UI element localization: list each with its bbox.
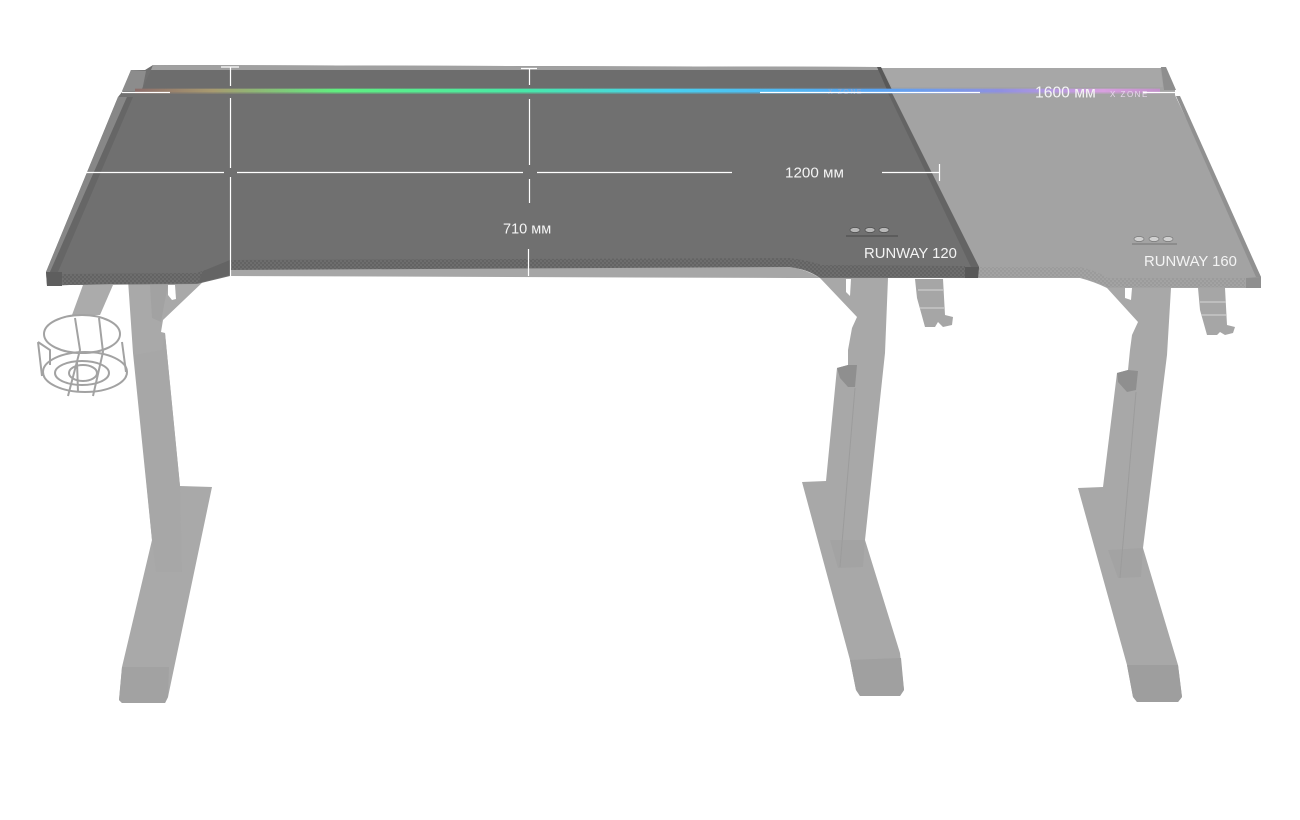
left leg: RUNWAY 120 bbox=[119, 280, 212, 703]
dimension: 1200 mm width bbox=[85, 164, 940, 181]
hook: RUNWAY 160 bbox=[1198, 288, 1235, 335]
dimension: 710 mm depth, center bbox=[521, 68, 537, 276]
hook: RUNWAY 120 bbox=[915, 279, 953, 327]
RGB light strip bbox=[135, 88, 1160, 94]
logo text on strip, RUNWAY 120: X ZONE bbox=[828, 89, 863, 96]
tabletop: RUNWAY 120 (dark) bbox=[46, 65, 979, 286]
label: 1200 mm: 1200 мм bbox=[785, 164, 844, 182]
tabletop: RUNWAY 160 (light) bbox=[878, 67, 1261, 288]
label: 710 mm: 710 мм bbox=[503, 222, 551, 238]
label: RUNWAY 160: RUNWAY 160 bbox=[1144, 254, 1237, 270]
right leg: RUNWAY 160 bbox=[1078, 288, 1182, 702]
middle leg: RUNWAY 120 bbox=[802, 278, 904, 696]
back support arm and cup holder bbox=[38, 285, 127, 396]
label: 1600 mm: 1600 мм bbox=[1035, 84, 1096, 102]
label: RUNWAY 120: RUNWAY 120 bbox=[864, 246, 957, 262]
dimension: 710 mm depth, left bbox=[221, 67, 239, 276]
logo text on strip, RUNWAY 160: X ZONE bbox=[1110, 90, 1149, 99]
dimension: 1600 mm width bbox=[122, 92, 1175, 94]
